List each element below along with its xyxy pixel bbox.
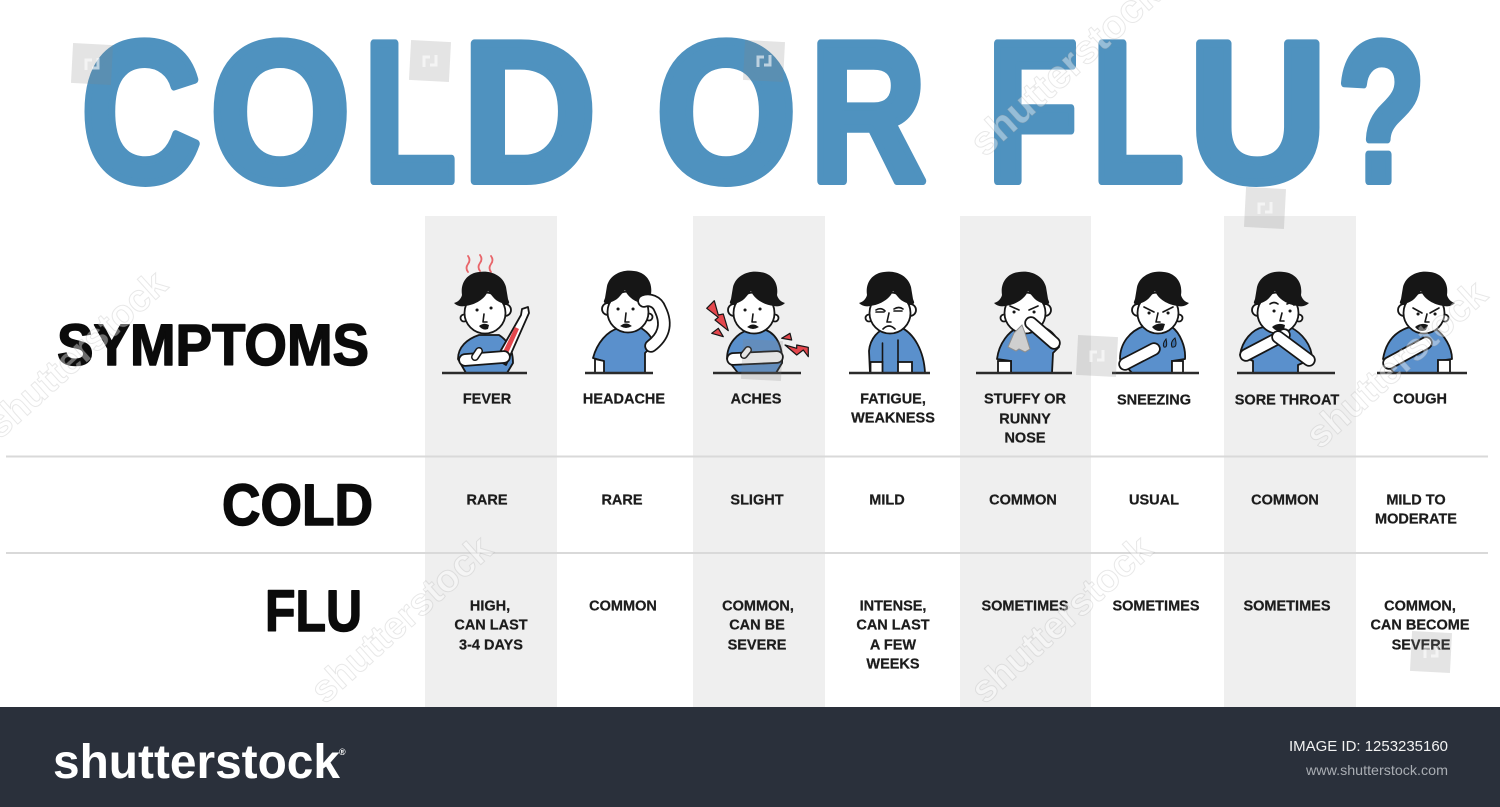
cold row values xyxy=(466,492,1457,528)
symptom labels: COUGH xyxy=(1393,392,1447,408)
title: C xyxy=(81,1,201,224)
symptom labels: ACHES xyxy=(731,392,782,408)
footer logo: shutterstock xyxy=(53,736,340,789)
symptom labels: STUFFY OR xyxy=(984,392,1066,408)
flu row values: SEVERE xyxy=(1392,638,1451,654)
title: ? xyxy=(1337,1,1426,224)
heading: symptoms: SYMPTOMS xyxy=(57,313,369,378)
icon: sneezing figure xyxy=(1112,272,1199,373)
flu row values: 3-4 DAYS xyxy=(459,638,523,654)
symptom labels: RUNNY xyxy=(999,412,1051,428)
cold row values: MILD TO xyxy=(1386,492,1446,508)
icon: aches figure xyxy=(707,272,808,373)
symptom labels: WEAKNESS xyxy=(851,410,935,426)
flu row values: COMMON xyxy=(589,598,657,614)
flu row values: INTENSE, xyxy=(860,598,926,614)
image id: IMAGE ID: 1253235160 xyxy=(1289,738,1448,755)
title: D xyxy=(462,1,596,224)
website: www.shutterstock.com xyxy=(1305,762,1448,778)
footer logo: ® xyxy=(339,747,346,757)
icon: headache figure xyxy=(585,271,664,373)
flu row values: CAN BE xyxy=(729,618,785,634)
cold row values: MILD xyxy=(869,492,905,508)
title xyxy=(81,1,1426,224)
symptom labels: FEVER xyxy=(463,392,512,408)
symptom labels: NOSE xyxy=(1004,430,1046,446)
symptom labels xyxy=(463,392,1447,446)
title: L xyxy=(1091,1,1184,224)
flu row values xyxy=(454,598,1470,672)
footer bar xyxy=(0,707,1500,807)
title: O xyxy=(210,1,351,224)
flu row values: CAN BECOME xyxy=(1370,618,1470,634)
icon: stuffy or runny nose figure xyxy=(976,272,1072,373)
flu row values: COMMON, xyxy=(1384,598,1456,614)
flu row values: WEEKS xyxy=(866,656,920,672)
watermark text: shutterstock xyxy=(1298,272,1496,457)
symptom labels: SNEEZING xyxy=(1117,392,1191,408)
watermark text: shutterstock xyxy=(963,527,1161,712)
title: F xyxy=(987,1,1078,224)
title: O xyxy=(656,1,797,224)
watermark text: shutterstock xyxy=(303,527,501,712)
symptom labels: FATIGUE, xyxy=(860,392,926,408)
column shading xyxy=(425,216,1356,707)
flu row values: A FEW xyxy=(870,638,916,654)
icon: fever figure xyxy=(442,255,529,373)
icon: cough figure xyxy=(1377,272,1467,373)
title: U xyxy=(1188,1,1327,224)
heading: flu: FLU xyxy=(265,579,362,644)
cold row values: RARE xyxy=(601,492,643,508)
cold row values: SLIGHT xyxy=(730,492,784,508)
watermark squares xyxy=(71,40,1452,673)
title: L xyxy=(363,1,456,224)
cold row values: RARE xyxy=(466,492,508,508)
symptom labels: SORE THROAT xyxy=(1235,392,1339,408)
cold row values: COMMON xyxy=(989,492,1057,508)
title: R xyxy=(810,1,926,224)
flu row values: CAN LAST xyxy=(454,618,528,634)
flu row values: HIGH, xyxy=(470,598,510,614)
icon: fatigue figure xyxy=(849,272,930,373)
icon: sore throat figure xyxy=(1237,272,1335,373)
symptom labels: HEADACHE xyxy=(583,392,665,408)
flu row values: SEVERE xyxy=(728,638,787,654)
cold row values: USUAL xyxy=(1129,492,1179,508)
heading: cold: COLD xyxy=(222,473,373,538)
cold row values: COMMON xyxy=(1251,492,1319,508)
flu row values: SOMETIMES xyxy=(1112,598,1200,614)
cold row values: MODERATE xyxy=(1375,512,1457,528)
flu row values: SOMETIMES xyxy=(1243,598,1331,614)
flu row values: CAN LAST xyxy=(856,618,930,634)
flu row values: COMMON, xyxy=(722,598,794,614)
flu row values: SOMETIMES xyxy=(981,598,1069,614)
